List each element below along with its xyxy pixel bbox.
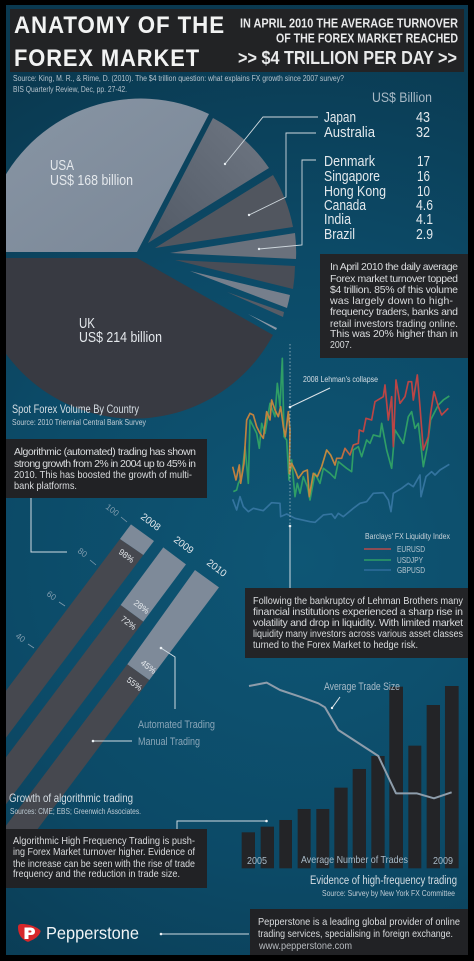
country table: 2.9	[416, 227, 433, 243]
callout: April 2010 turnover: This was 20% higher than in	[330, 328, 458, 340]
label: UK: UK	[79, 316, 95, 332]
bar chart legend labels: Automated Trading	[138, 719, 215, 731]
bar labels: 55%	[125, 675, 145, 693]
callout: algorithmic trading growth: bank platforms.	[14, 480, 77, 492]
bar chart legend labels: Manual Trading	[138, 736, 200, 748]
callout: Lehman bankruptcy	[245, 588, 468, 658]
wedge: Denmark	[170, 233, 296, 259]
callout: April 2010 turnover	[320, 254, 468, 358]
trade chart caption	[310, 875, 457, 898]
title: FOREX MARKET	[14, 45, 200, 72]
headline statistic	[238, 16, 458, 68]
callout: Lehman bankruptcy: volatility and drop in liquidity. With limited market	[253, 617, 463, 629]
wedge: Canada	[227, 292, 284, 317]
label: average trade size: Average Trade Size	[324, 681, 400, 693]
bar chart: growth of algorithmic trading	[6, 524, 219, 829]
title: ANATOMY OF THE	[14, 12, 225, 39]
source note: BIS Quarterly Review, Dec, pp. 27-42.	[13, 85, 127, 94]
source note	[13, 74, 344, 94]
axis ticks	[14, 502, 127, 648]
country table: Canada	[324, 198, 367, 214]
bar labels: 72%	[119, 614, 139, 632]
callout: algorithmic trading growth: Algorithmic (automated) trading has shown	[14, 446, 196, 458]
country table: US$ Billion	[372, 90, 432, 105]
axis ticks: 40	[14, 631, 28, 644]
country table: Japan	[324, 110, 356, 126]
footer company description	[250, 909, 468, 955]
bar 2008 manual	[6, 539, 143, 738]
country table: 17	[417, 154, 430, 170]
country table	[324, 90, 433, 243]
trade chart axis labels: Average Number of Trades	[301, 854, 408, 866]
country table: India	[324, 212, 352, 228]
Lehman marker line	[289, 344, 291, 588]
bar 2009 manual	[6, 605, 143, 804]
label: UK	[79, 316, 162, 346]
wedge: USA	[0, 99, 209, 252]
pie caption: Spot Forex Volume By Country	[12, 402, 139, 416]
title	[14, 12, 225, 72]
chart legend: EURUSD	[397, 544, 425, 554]
bar labels: 2009	[171, 535, 196, 557]
callout: April 2010 turnover: retail investors trading online.	[330, 318, 458, 330]
bar labels	[117, 512, 229, 693]
axis ticks: 100	[104, 502, 121, 518]
pie caption: Source: 2010 Triennial Central Bank Survey	[12, 417, 147, 427]
bar 2010 manual	[6, 664, 149, 829]
pie leader lines	[224, 117, 318, 250]
callout: high frequency trading: ing Forex Market turnover higher. Evidence of	[13, 846, 195, 858]
bar labels: 2010	[204, 558, 229, 580]
footer company description: www.pepperstone.com	[258, 940, 352, 952]
bar chart caption: Sources: CME; EBS; Greenwich Associates.	[10, 806, 141, 816]
wedge: Australia	[155, 175, 293, 248]
wedge: Hong Kong	[190, 271, 290, 308]
country table: 10	[417, 184, 430, 200]
series: EURUSD	[233, 375, 448, 497]
callout: high frequency trading	[6, 829, 207, 888]
header band	[10, 9, 464, 72]
label: average trade size	[324, 681, 400, 709]
country table: 4.6	[416, 198, 433, 214]
chart legend: Barclays' FX Liquidity Index	[365, 531, 451, 541]
country table: Australia	[324, 125, 376, 141]
trade chart axis labels	[247, 854, 453, 867]
bar chart caption: Growth of algorithmic trading	[9, 791, 133, 805]
pie caption	[12, 402, 147, 427]
bar chart caption	[9, 791, 141, 816]
bar 2008 automated	[120, 524, 154, 555]
label: UK: US$ 214 billion	[79, 330, 162, 346]
wedge: India	[248, 314, 277, 330]
trade chart axis labels: 2009	[433, 855, 453, 867]
chart legend	[364, 531, 451, 575]
callout: April 2010 turnover: was largely down to high-	[329, 295, 454, 307]
callout: algorithmic trading growth: strong growth from 2% in 2004 up to 45% in	[14, 458, 196, 470]
country table: Brazil	[324, 227, 355, 243]
wedge: Singapore	[175, 260, 295, 289]
wedge: Japan	[148, 118, 269, 243]
trade chart axis labels: 2005	[247, 855, 267, 867]
leader: HFT callout to bars	[177, 820, 268, 829]
source note: Source: King, M. R., & Rime, D. (2010). The $4 trillion question: what explains FX growth since 2007 survey?	[13, 74, 344, 83]
callout: high frequency trading: frequency and the reduction in trade size.	[13, 868, 180, 880]
leader: logo to company text	[160, 933, 249, 935]
axis ticks: 60	[45, 589, 59, 602]
bar 2010 automated	[127, 570, 219, 680]
leader: algorithmic callout to bars	[31, 498, 67, 552]
pie chart: spot forex volume by country	[0, 99, 296, 419]
country table: Hong Kong	[324, 184, 386, 200]
callout: Lehman bankruptcy: turned to the Forex Market to hedge risk.	[253, 639, 418, 651]
series: USDJPY	[233, 358, 449, 500]
axis ticks: 80	[76, 546, 90, 559]
callout: algorithmic trading growth: 2010. This has boosted the growth of multi-	[14, 469, 192, 481]
country table: 32	[416, 125, 430, 141]
label: USA: US$ 168 billion	[50, 173, 133, 189]
logo: Pepperstone: Pepperstone	[46, 923, 139, 943]
annotation: 2008 Lehman's collapse: 2008 Lehman's collapse	[303, 374, 378, 384]
bar labels: 98%	[117, 547, 137, 565]
callout: algorithmic trading growth	[6, 439, 207, 498]
leader: automated trading	[160, 647, 175, 709]
callout: April 2010 turnover: frequency traders, banks and	[330, 306, 458, 318]
callout: April 2010 turnover: 2007.	[330, 339, 352, 351]
country table: 16	[417, 169, 430, 185]
line chart: Barclays FX liquidity index	[233, 358, 449, 522]
wedge: UK	[0, 258, 273, 419]
callout: Lehman bankruptcy: financial institutions experienced a sharp rise in	[253, 606, 463, 618]
country table: 43	[416, 110, 430, 126]
bar labels: 2008	[138, 512, 163, 534]
callout: April 2010 turnover: Forex market turnover topped	[330, 273, 458, 285]
callout: April 2010 turnover: In April 2010 the daily average	[330, 261, 458, 273]
chart legend: GBPUSD	[397, 565, 425, 575]
line: average trade size	[249, 683, 452, 798]
callout: high frequency trading: Algorithmic High Frequency Trading is push-	[13, 835, 195, 847]
bar labels: 45%	[139, 658, 159, 676]
series: GBPUSD	[233, 464, 449, 522]
label: USA	[50, 158, 133, 189]
callout: April 2010 turnover: $4 trillion. 85% of this volume	[330, 284, 458, 296]
country table: Singapore	[324, 169, 380, 185]
bar chart legend labels	[138, 719, 215, 748]
bar labels: 28%	[132, 598, 152, 616]
leader: manual trading	[92, 740, 132, 742]
bar 2009 automated	[121, 547, 186, 622]
callout: high frequency trading: the increase can be seen with the rise of trade	[13, 858, 195, 870]
annotation: 2008 Lehman's collapse	[289, 374, 378, 408]
country table: Denmark	[324, 154, 376, 170]
label: USA: USA	[50, 158, 74, 174]
pie labels	[50, 158, 162, 346]
country table: 4.1	[416, 212, 433, 228]
chart legend: USDJPY	[397, 555, 423, 565]
bar chart: average number of trades	[242, 686, 459, 868]
icon: red shield	[18, 924, 41, 942]
